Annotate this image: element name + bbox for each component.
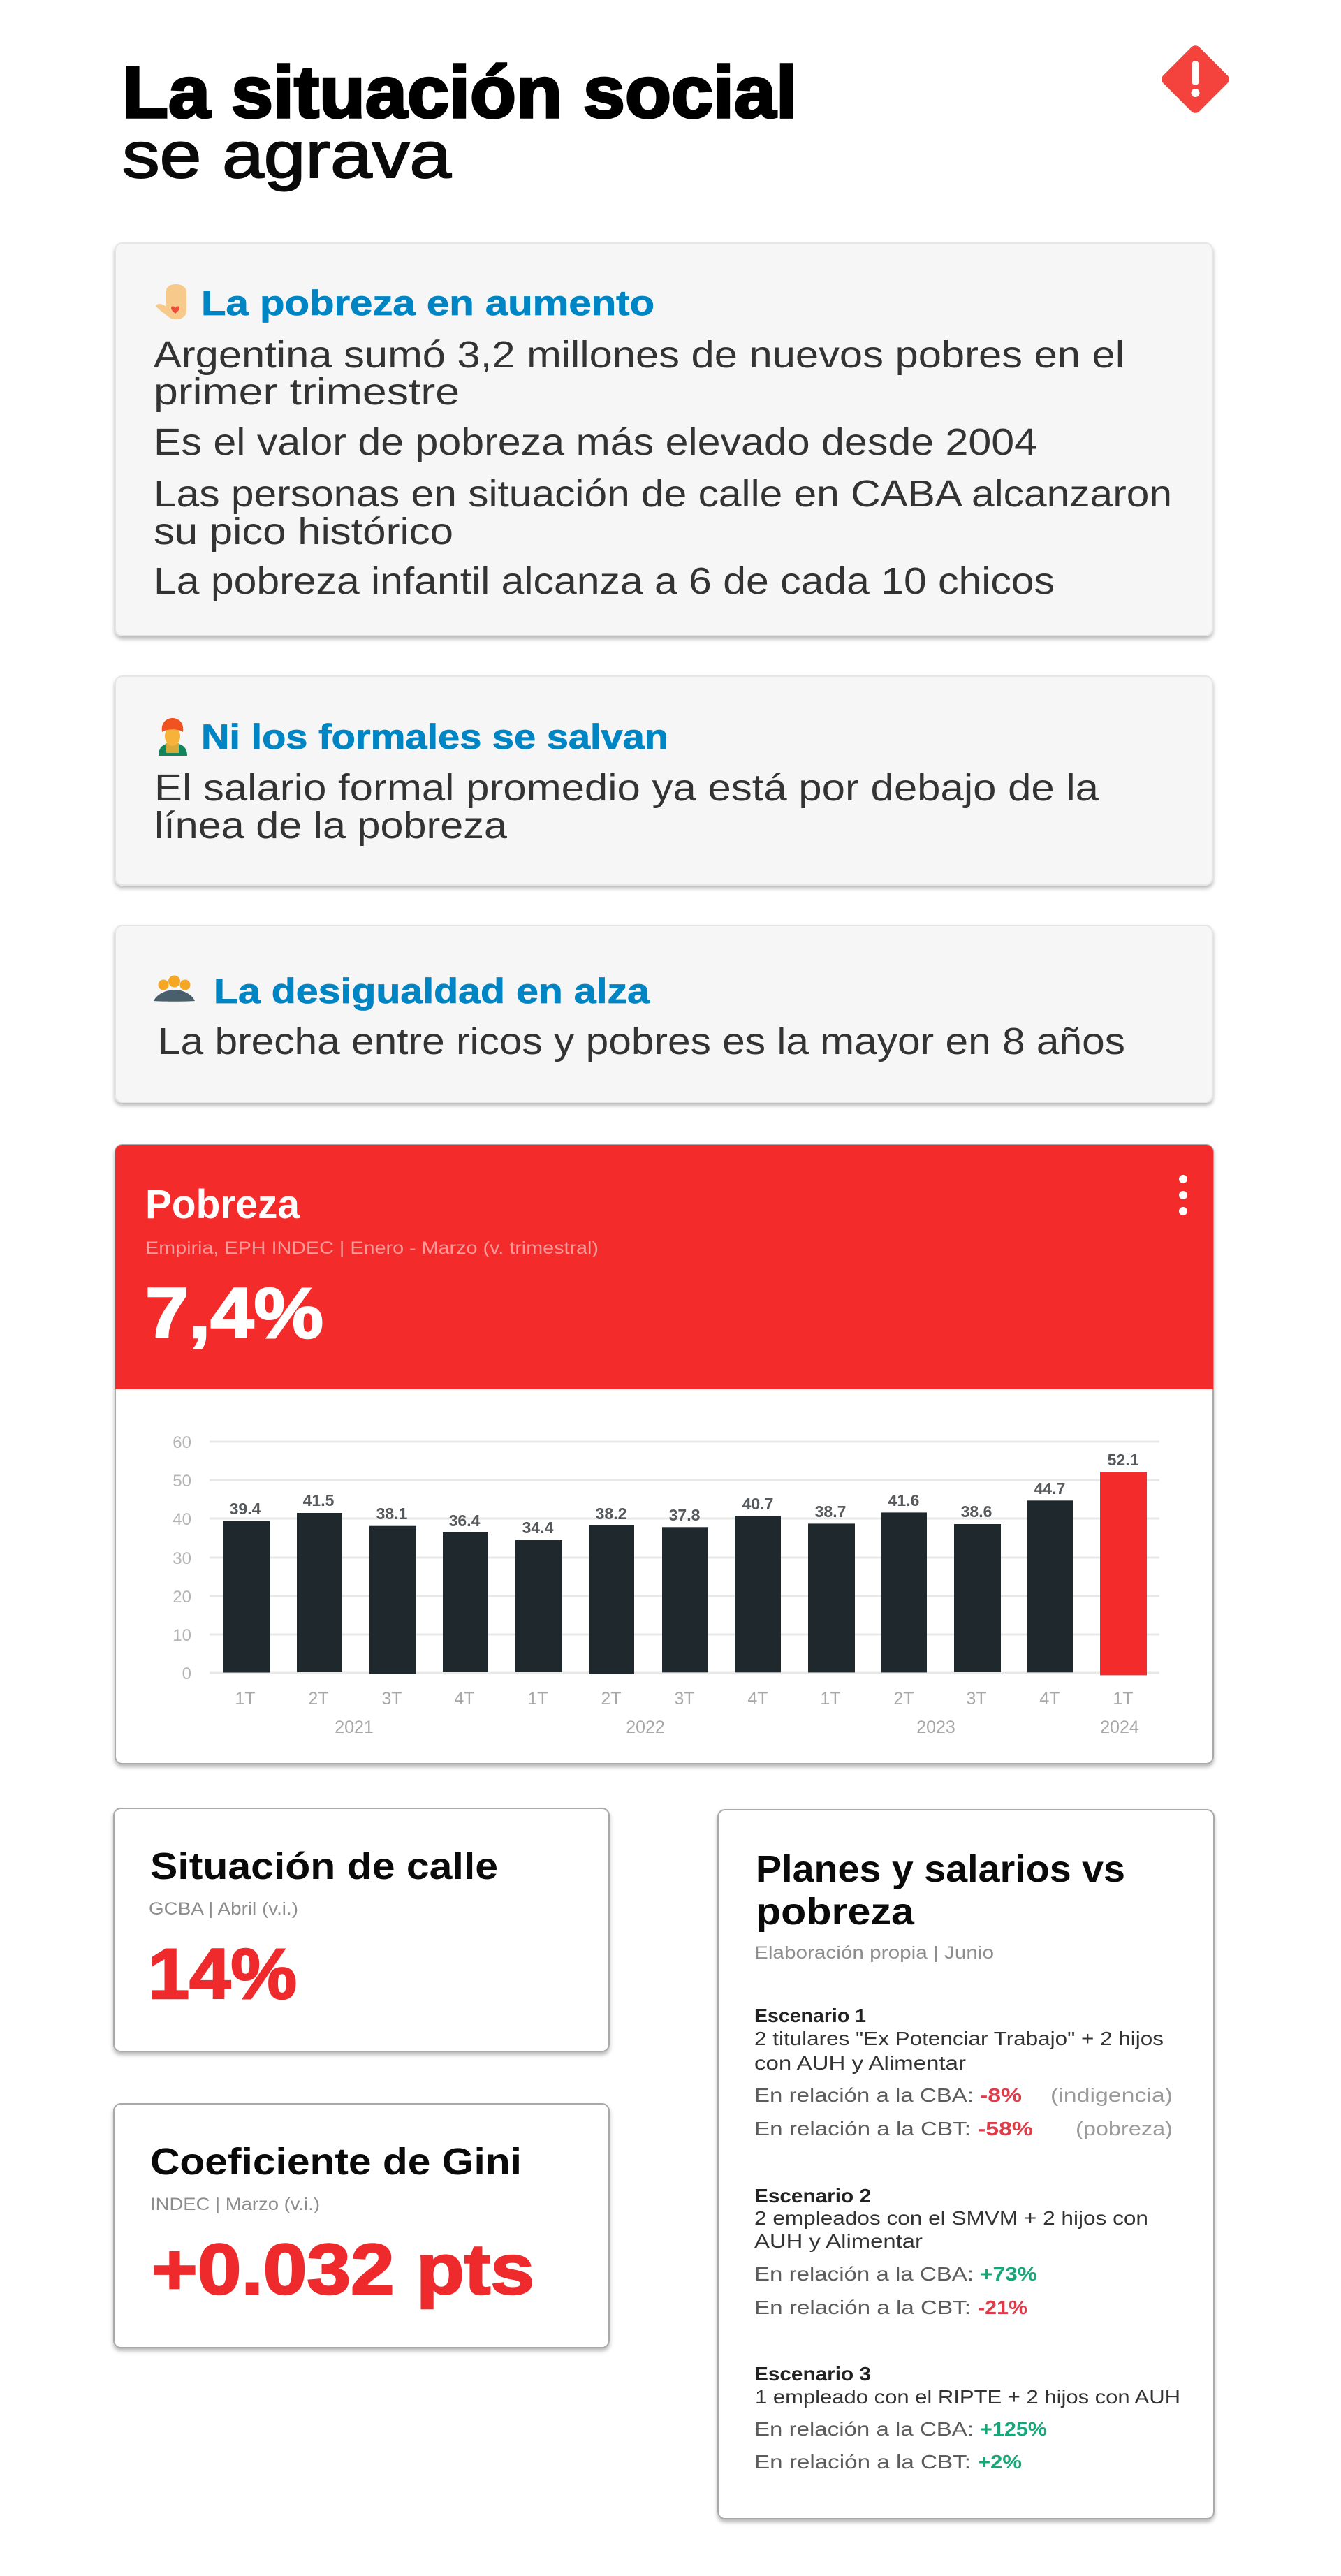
scenario 2: +73% [980,2263,1037,2285]
scenario 3: +2% [978,2451,1022,2473]
bar chart: 39.4 [230,1500,261,1518]
bar chart: 37.8 [669,1506,701,1524]
bar chart: 2023 [916,1718,955,1737]
icon: group of people [154,975,195,1002]
bar chart: 44.7 [1034,1479,1065,1498]
bar chart: 1T [820,1689,841,1708]
bar chart: 1T [235,1689,256,1708]
scenario 3 [754,2363,1180,2473]
icon: three dots menu [1179,1175,1187,1215]
source: INDEC | Marzo (v.i.) [150,2195,320,2214]
panel: ni los formales se salvan [115,676,1212,885]
bar chart: 1T [1113,1689,1134,1708]
big number: 7,4% [145,1273,323,1353]
text block: Las personas en situación de calle en CABA alcanzaron [154,473,1172,515]
heading: Situación de calle [150,1845,498,1887]
scenario 1 [754,2005,1173,2139]
bar chart: 4T [747,1689,768,1708]
scenario 1: (pobreza) [1076,2118,1173,2139]
scenario 2: -21% [978,2297,1027,2318]
icon: worker [159,718,187,756]
heading: La pobreza en aumento [201,284,654,323]
bar chart: 50 [173,1472,191,1491]
heading: Pobreza [145,1182,300,1227]
icon: alert diamond [1159,43,1231,115]
heading: Coeficiente de Gini [150,2141,522,2183]
scenario 1: con AUH y Alimentar [754,2052,966,2074]
scenario 3: +125% [980,2418,1047,2440]
text block: su pico histórico [154,511,453,552]
bar chart: 38.1 [376,1505,408,1523]
bar chart: 1T [527,1689,548,1708]
text block: Es el valor de pobreza más elevado desde 2004 [154,421,1037,463]
bar chart: 38.6 [961,1502,992,1521]
heading: Planes y salarios vs [756,1848,1125,1890]
bar chart: 2022 [626,1718,665,1737]
bar chart: 20 [173,1588,191,1607]
bar chart: 40 [173,1510,191,1529]
scenario 1: 2 titulares "Ex Potenciar Trabajo" + 2 hijos [754,2028,1164,2049]
scenario 2: En relación a la CBT: [754,2297,971,2318]
source: GCBA | Abril (v.i.) [149,1899,298,1919]
text block: línea de la pobreza [154,805,508,847]
title: se agrava [122,118,452,191]
scenario 1: En relación a la CBA: [754,2084,974,2106]
text block: El salario formal promedio ya está por debajo de la [154,767,1099,809]
scenario 2: 2 empleados con el SMVM + 2 hijos con [754,2207,1148,2229]
bar chart: 38.2 [596,1505,626,1523]
bar chart: 3T [674,1689,695,1708]
title: La situación social [122,52,797,133]
text block: primer trimestre [154,371,460,413]
text block: La pobreza infantil alcanza a 6 de cada 10 chicos [154,560,1055,602]
scenario 1: (indigencia) [1050,2084,1173,2106]
panel: situación de calle [114,1808,609,2051]
scenario 1: -8% [980,2084,1022,2106]
bar chart: 2T [308,1689,329,1708]
red header [115,1145,1213,1389]
scenario 1: -58% [978,2118,1033,2139]
panel: planes y salarios vs pobreza [718,1810,1214,2519]
heading: La desigualdad en alza [214,972,650,1011]
heading: Ni los formales se salvan [201,717,668,756]
heading: pobreza [756,1891,915,1933]
bar chart [173,1433,1159,1737]
bar chart: 4T [1039,1689,1060,1708]
scenario 2: AUH y Alimentar [754,2230,923,2252]
bar chart: 38.7 [815,1502,846,1521]
big number: 14% [148,1934,297,2014]
bar chart: 2T [601,1689,622,1708]
scenario 2: Escenario 2 [754,2185,871,2207]
heading [756,1848,1125,1933]
scenario 2: En relación a la CBA: [754,2263,974,2285]
bar chart: 40.7 [742,1495,773,1513]
bar chart: 10 [173,1626,191,1645]
scenario 1: En relación a la CBT: [754,2118,971,2139]
bar chart: 4T [454,1689,475,1708]
text block: Argentina sumó 3,2 millones de nuevos pobres en el [154,334,1124,376]
panel: la desigualdad en alza [115,925,1212,1102]
scenario 2 [754,2185,1148,2318]
bar chart: 30 [173,1549,191,1568]
text block [154,334,1172,602]
text block [154,767,1099,847]
icon: hand with heart [156,284,186,319]
bar chart: 41.6 [888,1491,919,1509]
bar chart: 41.5 [303,1491,335,1509]
panel: pobreza chart card [115,1145,1213,1764]
bar chart: 3T [381,1689,402,1708]
bar chart: 60 [173,1433,191,1452]
scenario 3: Escenario 3 [754,2363,871,2385]
bar chart: 2024 [1100,1718,1139,1737]
bar chart: 36.4 [449,1512,481,1530]
bar chart: 34.4 [522,1518,554,1537]
bar chart: 52.1 [1108,1451,1139,1469]
bar chart: 2T [893,1689,914,1708]
source: Empiria, EPH INDEC | Enero - Marzo (v. trimestral) [145,1238,599,1258]
scenario 1: Escenario 1 [754,2005,866,2026]
bar chart: 0 [182,1664,191,1683]
scenario 3: En relación a la CBT: [754,2451,971,2473]
scenario 3: 1 empleado con el RIPTE + 2 hijos con AUH [755,2386,1180,2408]
bar chart: 3T [966,1689,987,1708]
source: Elaboración propia | Junio [754,1943,994,1963]
bar chart: 2021 [335,1718,374,1737]
panel: coeficiente de gini [114,2104,609,2348]
panel: la pobreza en aumento [115,243,1212,636]
scenario 3: En relación a la CBA: [754,2418,974,2440]
big number: +0.032 pts [152,2230,534,2309]
title [122,52,797,191]
text block: La brecha entre ricos y pobres es la mayor en 8 años [158,1020,1125,1062]
